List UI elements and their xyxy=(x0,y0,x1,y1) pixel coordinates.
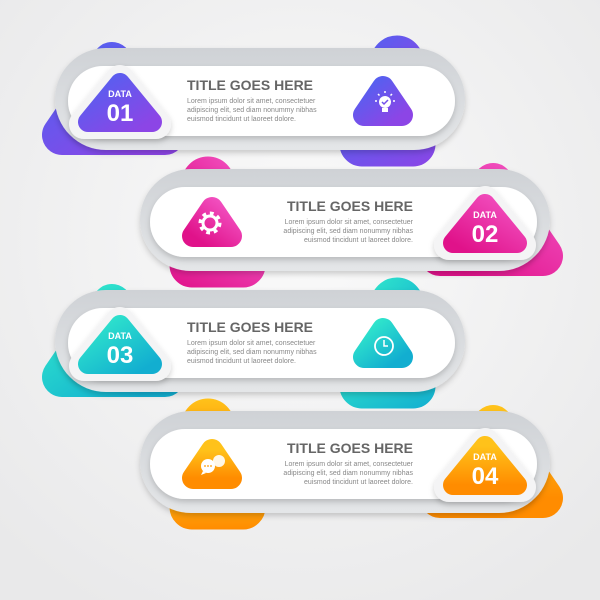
panel: row 2 xyxy=(140,157,550,287)
text block 3: adipiscing elit, sed diam nonummy nibhas xyxy=(187,349,317,356)
data badge 03: DATA xyxy=(108,331,132,341)
title 4: TITLE GOES HERE xyxy=(287,440,413,456)
data badge 02: DATA xyxy=(473,210,497,220)
data badge 01 xyxy=(88,83,152,127)
text block 3: euismod tincidunt ut laoreet dolore. xyxy=(187,358,296,365)
text block 2: Lorem ipsum dolor sit amet, consectetuer xyxy=(285,219,414,226)
text block 2: euismod tincidunt ut laoreet dolore. xyxy=(304,237,413,244)
data badge 03: 03 xyxy=(107,342,133,369)
text block 2: adipiscing elit, sed diam nonummy nibhas xyxy=(283,228,413,235)
icon: clock xyxy=(364,329,402,357)
icon: gear xyxy=(201,214,219,232)
title 2: TITLE GOES HERE xyxy=(287,198,413,214)
data badge 04: 04 xyxy=(472,463,499,490)
data badge 04: DATA xyxy=(473,452,497,462)
text block 4: Lorem ipsum dolor sit amet, consectetuer xyxy=(285,461,414,468)
icon: lightbulb xyxy=(364,87,402,115)
text block 1: euismod tincidunt ut laoreet dolore. xyxy=(187,116,296,123)
text block 4: euismod tincidunt ut laoreet dolore. xyxy=(304,479,413,486)
text block 1: Lorem ipsum dolor sit amet, consectetuer xyxy=(187,98,316,105)
panel: row 1 xyxy=(55,36,465,166)
text block 3: Lorem ipsum dolor sit amet, consectetuer xyxy=(187,340,316,347)
data badge 01: DATA xyxy=(108,89,132,99)
text block 1: adipiscing elit, sed diam nonummy nibhas xyxy=(187,107,317,114)
data badge 03 xyxy=(88,325,152,369)
icon: chat bubbles xyxy=(201,455,225,475)
panel: row 4 xyxy=(140,399,550,529)
data badge 04 xyxy=(472,452,499,490)
data badge 02: 02 xyxy=(472,221,498,248)
title 1: TITLE GOES HERE xyxy=(187,77,313,93)
data badge 01: 01 xyxy=(107,100,133,127)
title 3: TITLE GOES HERE xyxy=(187,319,313,335)
text block 4: adipiscing elit, sed diam nonummy nibhas xyxy=(283,470,413,477)
panel: row 3 xyxy=(55,278,465,408)
